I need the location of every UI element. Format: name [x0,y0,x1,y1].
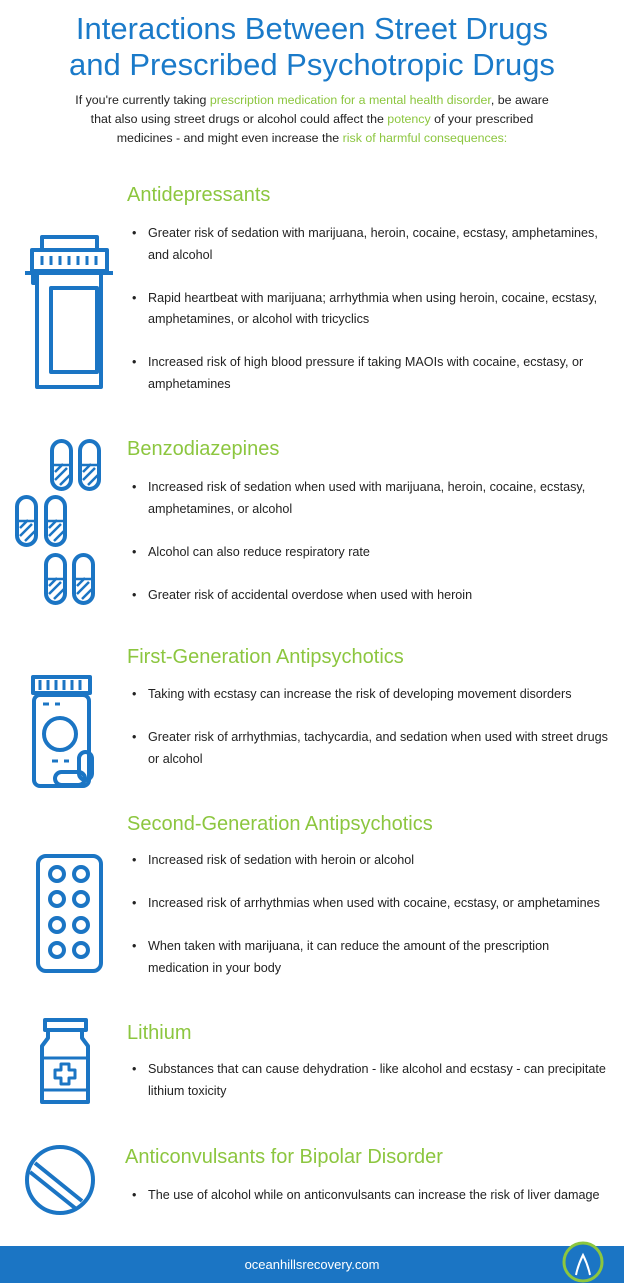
heading: benzodiazepines: Benzodiazepines [127,438,279,460]
bullets: second-generation: Increased risk of sedation with heroin or alcohol [148,853,414,867]
footer [0,1246,624,1283]
heading: second-generation antipsychotics: Second-Generation Antipsychotics [127,813,433,835]
bullets: antidepressants: • [132,355,136,369]
bullets: second-generation: • [132,939,136,953]
title: Interactions Between Street Drugs [76,11,548,46]
bullets: antidepressants: and alcohol [148,248,212,262]
icon: no-sign pill [27,1147,93,1213]
bullets: benzodiazepines [132,480,585,602]
bullets: benzodiazepines: • [132,588,136,602]
heading: anticonvulsants: Anticonvulsants for Bipolar Disorder [125,1146,443,1168]
bullets: first-generation: • [132,730,136,744]
footer: oceanhillsrecovery.com [245,1257,379,1272]
bullets: benzodiazepines: Greater risk of accidental overdose when used with heroin [148,588,472,602]
bullets: benzodiazepines: Increased risk of sedation when used with marijuana, heroin, cocaine, ecstasy, [148,480,585,494]
bullets: lithium: Substances that can cause dehydration - like alcohol and ecstasy - can precipitate [148,1062,606,1076]
bullets: second-generation: • [132,896,136,910]
bullets: lithium: • [132,1062,136,1076]
bullets: antidepressants: Rapid heartbeat with marijuana; arrhythmia when using heroin, cocaine, ecstasy, [148,290,597,304]
bullets: second-generation: • [132,853,136,867]
bullets: antidepressants: Increased risk of high blood pressure if taking MAOIs with cocaine, ecstasy, or [148,355,583,369]
bullets: antidepressants: • [132,226,136,240]
icon: pill jar with pills [33,677,92,786]
icon: pill bottle [25,237,113,387]
bullets: second-generation: medication in your body [148,960,281,974]
icon: lithium bottle [42,1020,88,1102]
bullets: antidepressants: Greater risk of sedation with marijuana, heroin, cocaine, ecstasy, amphetamines, [148,226,598,240]
intro text: medicines - and might even increase the risk of harmful consequences: [117,131,507,145]
heading: lithium: Lithium [127,1022,191,1044]
bullets: anticonvulsants: • [132,1188,136,1202]
bullets: antidepressants: amphetamines [148,376,231,390]
bullets: antidepressants: amphetamines, or alcohol with tricyclics [148,312,369,326]
bullets: first-generation: Taking with ecstasy can increase the risk of developing movement disorders [148,687,572,701]
bullets: anticonvulsants: The use of alcohol while on anticonvulsants can increase the risk of liver damage [148,1188,600,1202]
bullets: benzodiazepines: Alcohol can also reduce respiratory rate [148,544,370,558]
bullets: first-generation [132,687,608,766]
bullets: second-generation: Increased risk of arrhythmias when used with cocaine, ecstasy, or amphetamines [148,896,600,910]
bullets: benzodiazepines: • [132,480,136,494]
title [69,11,555,82]
intro text [75,93,549,145]
bullets: antidepressants: • [132,290,136,304]
bullets: second-generation [132,853,600,974]
bullets: lithium [132,1062,606,1098]
bullets: second-generation: When taken with marijuana, it can reduce the amount of the prescription [148,939,549,953]
bullets: first-generation: or alcohol [148,752,203,766]
intro text: that also using street drugs or alcohol could affect the potency of your prescribed [91,112,533,126]
bullets: lithium: lithium toxicity [148,1084,226,1098]
icon: capsules [17,441,99,603]
bullets: benzodiazepines: amphetamines, or alcohol [148,502,292,516]
heading: antidepressants: Antidepressants [127,184,270,206]
bullets: first-generation: • [132,687,136,701]
bullets: first-generation: Greater risk of arrhythmias, tachycardia, and sedation when used with street drugs [148,730,608,744]
intro text: If you're currently taking prescription medication for a mental health disorder, be aware [75,93,549,107]
icon: blister pack [38,856,101,971]
heading: first-generation antipsychotics: First-Generation Antipsychotics [127,646,404,668]
icons [15,235,113,1215]
bullets: antidepressants [132,226,598,390]
bullets: benzodiazepines: • [132,544,136,558]
title: and Prescribed Psychotropic Drugs [69,47,555,82]
